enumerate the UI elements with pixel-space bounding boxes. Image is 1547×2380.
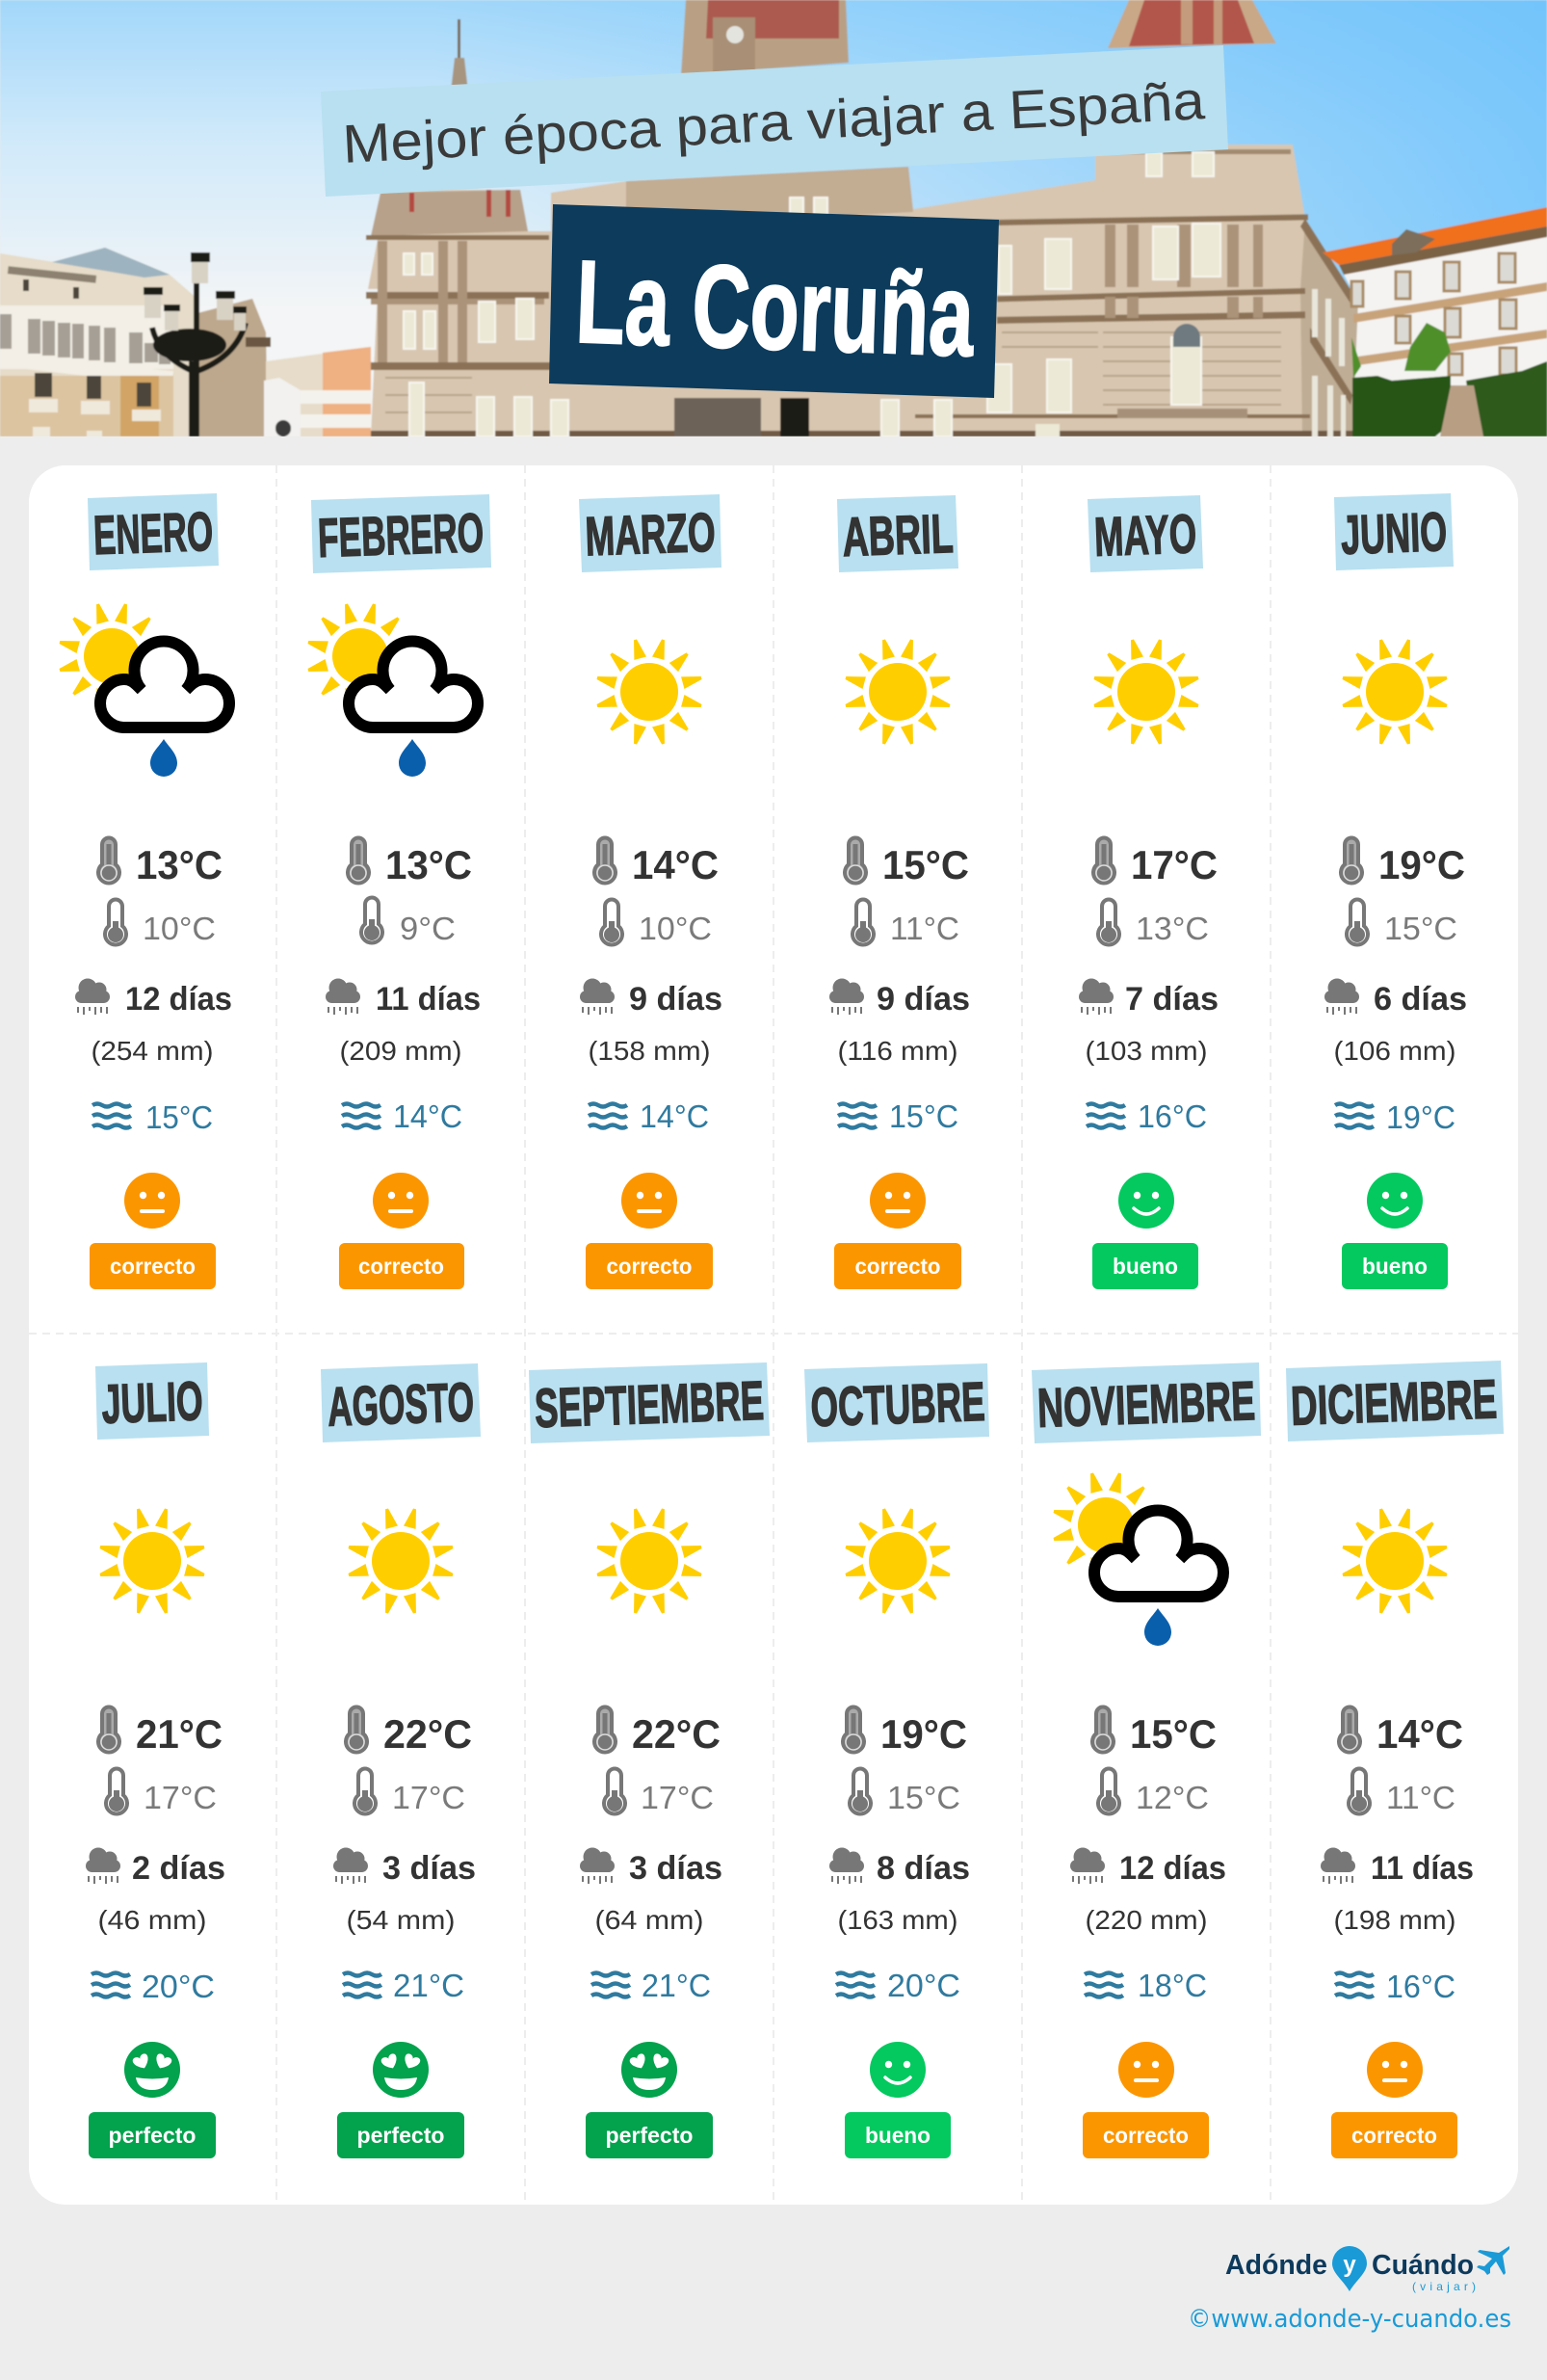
rainfall: (103 mm) xyxy=(1085,1036,1208,1066)
rainfall: (54 mm) xyxy=(347,1905,455,1935)
month label: SEPTIEMBRE xyxy=(534,1370,765,1440)
min temperature: 11°C xyxy=(890,911,959,946)
min temperature: 15°C xyxy=(1384,911,1457,946)
logo wordmark: Adónde: Adónde xyxy=(1225,2250,1327,2281)
rating badge: bueno xyxy=(1362,1254,1428,1279)
panel: noviembre xyxy=(1032,1362,1261,2158)
rainy days: 11 días xyxy=(1371,1850,1474,1887)
rating badge: bueno xyxy=(1113,1254,1178,1279)
rainfall: (209 mm) xyxy=(339,1036,462,1066)
min temperature: 9°C xyxy=(400,911,456,946)
min temperature xyxy=(1347,900,1457,946)
sea temperature: 20°C xyxy=(142,1969,215,2004)
rainfall: (64 mm) xyxy=(595,1905,703,1935)
min temperature: 17°C xyxy=(641,1780,714,1815)
rainy days xyxy=(829,979,970,1018)
header photo: La Coruña palace xyxy=(0,0,1547,436)
palace pilasters xyxy=(371,225,1263,362)
sea temperature xyxy=(1085,1968,1207,2003)
max temperature: 19°C xyxy=(1378,842,1465,887)
rainy days xyxy=(1321,1848,1474,1887)
mood icon xyxy=(621,2042,677,2098)
month label xyxy=(1088,495,1203,572)
rating badge xyxy=(1331,2112,1457,2158)
panel: febrero xyxy=(306,494,491,1289)
min temperature: 10°C xyxy=(143,911,216,946)
max temperature: 14°C xyxy=(632,842,719,887)
rainy days: 7 días xyxy=(1125,981,1219,1018)
rating badge xyxy=(845,2112,951,2158)
max temperature: 15°C xyxy=(1130,1711,1217,1757)
min temperature xyxy=(601,900,712,946)
month label: ABRIL xyxy=(841,503,955,569)
month label xyxy=(311,494,491,573)
max temperature xyxy=(1093,838,1218,887)
rainy days: 3 días xyxy=(629,1850,722,1887)
max temperature: 14°C xyxy=(1377,1711,1463,1757)
rainy days xyxy=(580,1848,722,1887)
rainfall: (254 mm) xyxy=(91,1036,214,1066)
mood icon xyxy=(1367,1173,1423,1229)
max temperature xyxy=(845,838,969,887)
max temperature: 15°C xyxy=(882,842,969,887)
min temperature: 10°C xyxy=(639,911,712,946)
mood icon xyxy=(1118,2042,1174,2098)
chapel and peach building xyxy=(197,299,371,436)
rating badge xyxy=(337,2112,464,2158)
rainfall: (116 mm) xyxy=(838,1036,957,1066)
sea temperature xyxy=(591,1968,711,2003)
rating badge xyxy=(89,2112,216,2158)
icon: map pin: y xyxy=(1343,2252,1356,2278)
logo wordmark: Cuándo: Cuándo xyxy=(1372,2250,1474,2281)
rainfall: (46 mm) xyxy=(98,1905,206,1935)
min temperature: 15°C xyxy=(887,1780,960,1815)
rainy days xyxy=(333,1848,476,1887)
trees and hedges xyxy=(1351,323,1547,436)
min temperature: 13°C xyxy=(1136,911,1209,946)
month label xyxy=(529,1362,770,1443)
palace main body xyxy=(366,0,1358,436)
panel: octubre xyxy=(804,1363,989,2158)
weather icon: sun and cloud with rain xyxy=(1052,1471,1223,1646)
brand logo xyxy=(1225,2246,1509,2293)
rainfall: (163 mm) xyxy=(838,1905,957,1935)
left tower spire xyxy=(439,19,478,188)
panel: agosto xyxy=(321,1363,481,2158)
rating badge: correcto xyxy=(607,1254,692,1279)
panel: julio xyxy=(86,1362,225,2158)
title banner xyxy=(321,45,1228,197)
rainy days xyxy=(829,1848,970,1887)
rating badge xyxy=(90,1243,216,1289)
rainy days: 9 días xyxy=(629,981,722,1018)
max temperature xyxy=(1092,1707,1217,1757)
sea temperature: 15°C xyxy=(889,1098,958,1134)
panel: climate card xyxy=(29,465,1518,2205)
rating badge: correcto xyxy=(358,1254,444,1279)
sea temperature xyxy=(343,1968,464,2003)
weather icon: sun xyxy=(1341,638,1449,746)
month label: NOVIEMBRE xyxy=(1036,1370,1256,1440)
rating badge xyxy=(834,1243,961,1289)
max temperature xyxy=(594,1707,721,1757)
rating badge xyxy=(1092,1243,1198,1289)
icon: map pin xyxy=(1332,2246,1367,2291)
max temperature xyxy=(843,1707,967,1757)
rating badge: bueno xyxy=(865,2123,931,2148)
panel: septiembre xyxy=(529,1362,770,2158)
min temperature: 11°C xyxy=(1386,1780,1455,1815)
month label xyxy=(1334,493,1454,570)
rating badge: correcto xyxy=(110,1254,196,1279)
rainy days xyxy=(580,979,722,1018)
rating badge: perfecto xyxy=(356,2123,445,2148)
sea temperature: 16°C xyxy=(1138,1098,1207,1134)
city name box xyxy=(549,204,999,398)
mood icon xyxy=(373,2042,429,2098)
rating badge: correcto xyxy=(1103,2123,1189,2148)
panel: abril xyxy=(829,495,970,1289)
rainfall: (220 mm) xyxy=(1085,1905,1208,1935)
max temperature xyxy=(98,1707,223,1757)
rainy days xyxy=(86,1848,225,1887)
weather icon: sun xyxy=(1341,1507,1449,1615)
sea temperature xyxy=(92,1099,213,1135)
min temperature xyxy=(361,898,456,946)
month label xyxy=(804,1363,989,1442)
min temperature xyxy=(105,900,216,946)
sea temperature: 14°C xyxy=(393,1098,462,1134)
icon: airplane xyxy=(1477,2246,1509,2275)
rating badge xyxy=(586,2112,713,2158)
logo tagline: (viajar) xyxy=(1412,2280,1476,2293)
min temperature xyxy=(106,1769,217,1815)
max temperature: 21°C xyxy=(136,1711,223,1757)
sea temperature: 16°C xyxy=(1386,1969,1455,2004)
max temperature: 22°C xyxy=(383,1711,472,1757)
sea temperature xyxy=(92,1969,215,2004)
max temperature xyxy=(1339,1707,1463,1757)
min temperature xyxy=(850,1769,960,1815)
rainy days xyxy=(1324,979,1467,1018)
sea temperature: 14°C xyxy=(640,1098,709,1134)
panel: enero xyxy=(58,493,232,1289)
mood icon xyxy=(1118,1173,1174,1229)
weather icon: sun xyxy=(595,638,703,746)
sea temperature: 21°C xyxy=(642,1968,711,2003)
month label: FEBRERO xyxy=(317,502,485,569)
month label xyxy=(321,1363,481,1442)
street lamp xyxy=(144,252,247,436)
month label: MARZO xyxy=(584,502,717,568)
rainy days: 3 días xyxy=(382,1850,476,1887)
weather icon: sun xyxy=(595,1507,703,1615)
rainfall: (106 mm) xyxy=(1333,1036,1456,1066)
max temperature xyxy=(594,838,719,887)
min temperature xyxy=(852,900,959,946)
clock tower xyxy=(681,0,849,75)
min temperature: 17°C xyxy=(392,1780,465,1815)
rating badge: perfecto xyxy=(108,2123,197,2148)
weather icon: sun xyxy=(98,1507,206,1615)
sea temperature xyxy=(836,1968,960,2003)
mood icon xyxy=(124,1173,180,1229)
min temperature xyxy=(1098,900,1209,946)
max temperature xyxy=(98,838,223,887)
sea temperature xyxy=(1335,1969,1455,2004)
month label: OCTUBRE xyxy=(810,1371,986,1439)
right tower dome xyxy=(1108,0,1276,48)
rainy days xyxy=(326,979,481,1018)
panel: marzo xyxy=(579,494,722,1289)
max temperature: 13°C xyxy=(136,842,223,887)
sea temperature: 15°C xyxy=(145,1099,213,1135)
max temperature: 17°C xyxy=(1131,842,1218,887)
rainy days: 9 días xyxy=(877,981,970,1018)
max temperature xyxy=(346,1707,472,1757)
panel: mayo xyxy=(1079,495,1219,1289)
rainy days: 12 días xyxy=(125,981,232,1018)
weather icon: sun xyxy=(844,1507,952,1615)
rainfall: (158 mm) xyxy=(588,1036,711,1066)
mood icon xyxy=(870,2042,926,2098)
weather icon: sun xyxy=(844,638,952,746)
rating badge xyxy=(1083,2112,1209,2158)
rating badge: correcto xyxy=(1351,2123,1437,2148)
sea temperature xyxy=(589,1098,709,1134)
left building xyxy=(0,248,197,436)
rainy days xyxy=(1070,1848,1226,1887)
month label: MAYO xyxy=(1093,503,1197,569)
month label xyxy=(88,493,219,570)
sea temperature: 19°C xyxy=(1386,1099,1455,1135)
max temperature xyxy=(1341,838,1465,887)
palace windows xyxy=(404,152,1220,436)
sea temperature: 18°C xyxy=(1138,1968,1207,2003)
stone courses xyxy=(385,332,1281,412)
month label xyxy=(95,1362,209,1440)
month label xyxy=(579,494,721,572)
rating badge xyxy=(586,1243,713,1289)
mood icon xyxy=(621,1173,677,1229)
panel: junio xyxy=(1324,493,1467,1289)
mood icon xyxy=(870,1173,926,1229)
ledges xyxy=(366,149,1358,436)
mood icon xyxy=(373,1173,429,1229)
rainy days: 12 días xyxy=(1119,1850,1226,1887)
month label: JUNIO xyxy=(1340,501,1448,567)
month label xyxy=(1032,1362,1261,1443)
max temperature: 13°C xyxy=(385,842,472,887)
panel: diciembre xyxy=(1286,1361,1504,2158)
rating badge: correcto xyxy=(855,1254,940,1279)
rainy days xyxy=(1079,979,1219,1018)
rating badge xyxy=(1342,1243,1448,1289)
weather icon: sun xyxy=(347,1507,455,1615)
month label: ENERO xyxy=(92,501,214,567)
max temperature: 19°C xyxy=(880,1711,967,1757)
sea temperature xyxy=(1087,1098,1207,1134)
month label xyxy=(837,495,958,572)
sea temperature xyxy=(342,1098,462,1134)
min temperature xyxy=(1098,1769,1209,1815)
sea temperature xyxy=(1335,1099,1455,1135)
website url: ©www.adonde-y-cuando.es xyxy=(1188,2305,1511,2334)
month label: AGOSTO xyxy=(327,1371,475,1439)
weather icon: sun xyxy=(1092,638,1200,746)
sea temperature: 20°C xyxy=(887,1968,960,2003)
city name box: La Coruña xyxy=(574,236,977,381)
min temperature xyxy=(604,1769,714,1815)
max temperature: 22°C xyxy=(632,1711,721,1757)
sea temperature xyxy=(838,1098,958,1134)
weather icon: sun and cloud with rain xyxy=(306,602,478,777)
mood icon xyxy=(1367,2042,1423,2098)
sea temperature: 21°C xyxy=(393,1968,464,2003)
title banner: Mejor época para viajar a España xyxy=(341,69,1207,174)
max temperature xyxy=(348,838,472,887)
mood icon xyxy=(124,2042,180,2098)
rating badge: perfecto xyxy=(605,2123,694,2148)
weather icon: sun and cloud with rain xyxy=(58,602,229,777)
rainy days: 8 días xyxy=(877,1850,970,1887)
rainy days: 2 días xyxy=(132,1850,225,1887)
right white building with orange roof xyxy=(1323,207,1547,436)
month label: JULIO xyxy=(100,1370,204,1436)
min temperature: 12°C xyxy=(1136,1780,1209,1815)
rainy days xyxy=(75,979,232,1018)
min temperature xyxy=(354,1769,465,1815)
min temperature xyxy=(1349,1769,1455,1815)
rainfall: (198 mm) xyxy=(1333,1905,1456,1935)
min temperature: 17°C xyxy=(144,1780,217,1815)
rating badge xyxy=(339,1243,464,1289)
rainy days: 6 días xyxy=(1374,981,1467,1018)
rainy days: 11 días xyxy=(376,981,481,1018)
